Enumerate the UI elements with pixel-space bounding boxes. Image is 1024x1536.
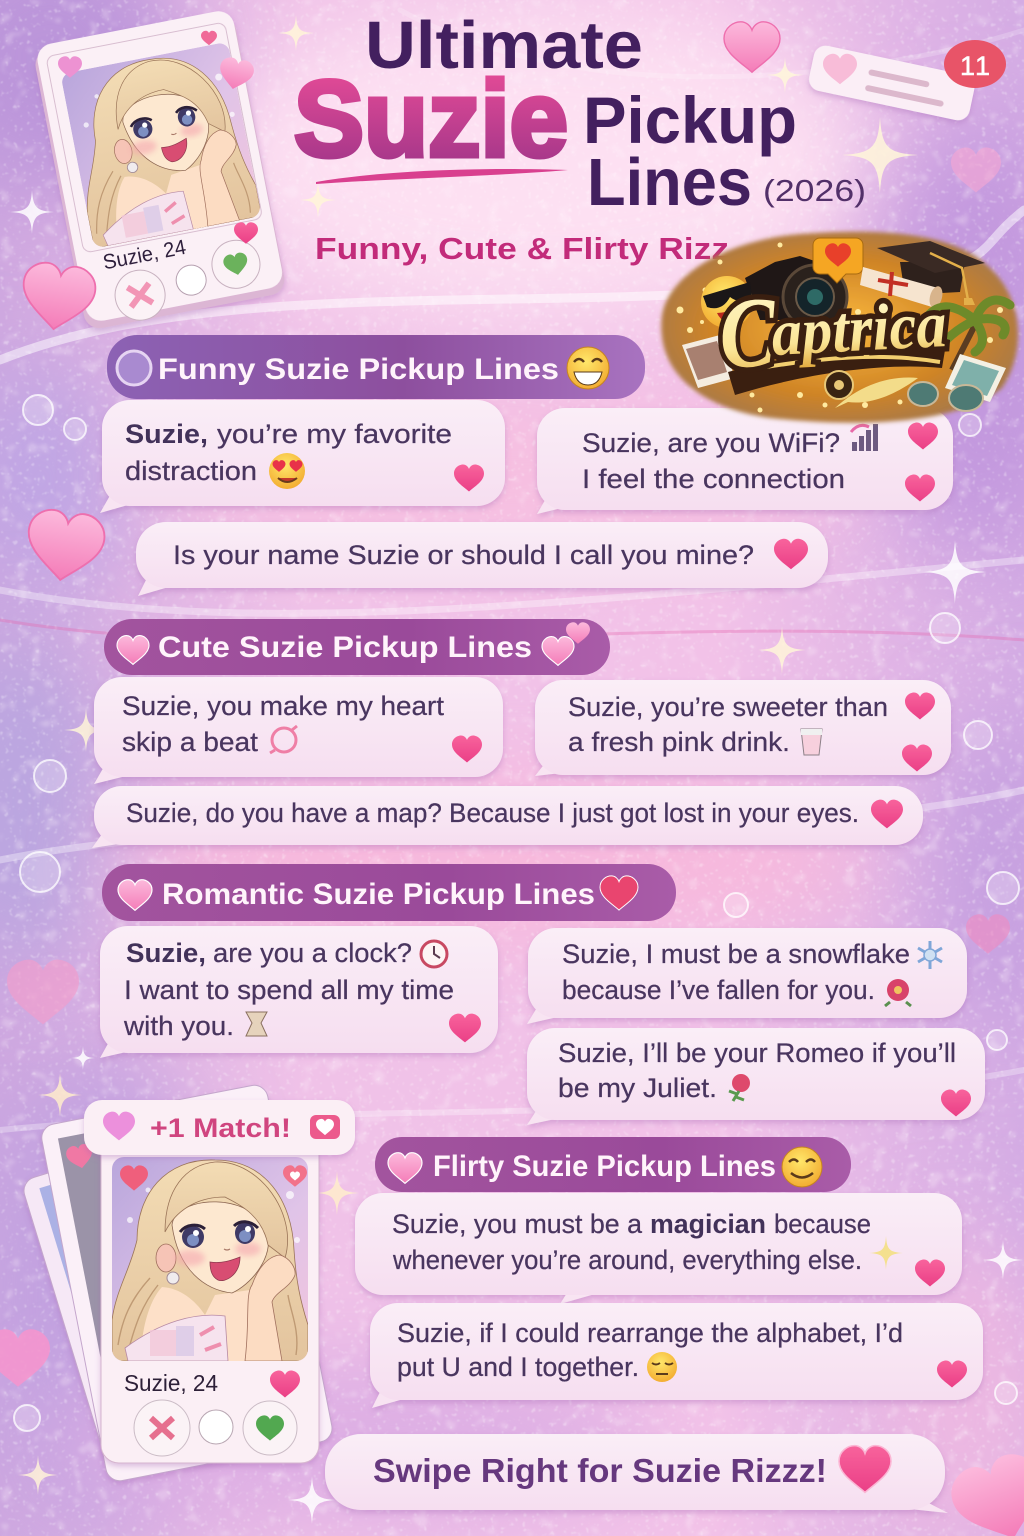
logo wordmark: aptrica bbox=[770, 288, 948, 370]
title: Lines bbox=[587, 145, 752, 220]
line text: you’re my favorite bbox=[217, 419, 452, 449]
logo wordmark bbox=[717, 267, 949, 395]
notification card bbox=[807, 40, 1006, 123]
line text: Suzie, are you WiFi? bbox=[582, 428, 840, 458]
line text: because bbox=[774, 1209, 871, 1239]
icon: like heart bbox=[270, 1370, 300, 1398]
line text: I want to spend all my time bbox=[124, 975, 454, 1005]
vacation photos bbox=[682, 335, 1006, 402]
icon: flower bbox=[885, 979, 911, 1006]
icon: heart bbox=[774, 539, 808, 569]
icon: heart bbox=[117, 636, 149, 664]
line text: skip a beat bbox=[122, 727, 259, 757]
line text: put U and I together. bbox=[397, 1352, 639, 1382]
line text: because I’ve fallen for you. bbox=[562, 975, 875, 1005]
bubble: call you mine bbox=[136, 522, 828, 596]
card: top profile card bbox=[18, 8, 287, 334]
icon: heart bbox=[937, 1360, 967, 1388]
line text: Is your name Suzie or should I call you mine? bbox=[173, 540, 754, 570]
line text: be my Juliet. bbox=[558, 1073, 717, 1103]
line text: are you a clock? bbox=[213, 938, 412, 968]
bubble: magician bbox=[355, 1193, 962, 1304]
bubble: snowflake bbox=[527, 928, 967, 1024]
cta text: Swipe Right for Suzie Rizzz! bbox=[373, 1452, 827, 1489]
graduation cap bbox=[877, 241, 985, 305]
icon: photo hearts bbox=[120, 1165, 307, 1191]
icon: star bbox=[869, 1236, 903, 1270]
line text: Suzie, I’ll be your Romeo if you’ll bbox=[558, 1038, 956, 1068]
icon: heart eyes bbox=[269, 453, 305, 489]
line text: I feel the connection bbox=[582, 464, 845, 494]
line text: Suzie, you must be a bbox=[392, 1209, 643, 1239]
line text bbox=[558, 1038, 956, 1103]
heading text: Romantic Suzie Pickup Lines bbox=[162, 878, 595, 911]
line text bbox=[397, 1318, 903, 1382]
card buttons bbox=[134, 1400, 297, 1456]
icon: signal bbox=[851, 424, 878, 451]
icon: heart bbox=[600, 876, 638, 910]
icon: heart bbox=[452, 736, 482, 762]
title: Pickup bbox=[583, 83, 797, 157]
line text: Suzie, bbox=[125, 419, 208, 449]
aviator sunglasses bbox=[908, 382, 983, 411]
section heading: flirty bbox=[375, 1137, 851, 1192]
subtitle: Funny, Cute & Flirty Rizz bbox=[315, 231, 729, 266]
icon: heart bbox=[449, 1014, 481, 1042]
line text bbox=[392, 1209, 871, 1275]
icon: spinning heart bbox=[270, 726, 297, 753]
match pill bbox=[84, 1100, 355, 1155]
icon: heart bbox=[839, 1446, 891, 1492]
icon: heart bbox=[103, 1112, 135, 1140]
diploma scroll bbox=[860, 267, 945, 309]
stacked back cards bbox=[21, 1083, 334, 1484]
icon: heart tile bbox=[310, 1115, 340, 1139]
sunglasses emoji bbox=[701, 276, 753, 328]
icon: heart bbox=[388, 1153, 422, 1183]
bubble: map bbox=[92, 786, 923, 848]
portrait: Suzie bbox=[112, 1157, 308, 1361]
icon: heart bbox=[871, 800, 903, 828]
line text bbox=[123, 938, 454, 1041]
line text: a fresh pink drink. bbox=[568, 727, 790, 757]
bubble: clock bbox=[100, 926, 498, 1058]
title bbox=[294, 8, 866, 220]
bubble: favorite distraction bbox=[100, 400, 505, 513]
line text: Suzie, do you have a map? Because I just got lost in your eyes. bbox=[126, 798, 859, 828]
profile name: Suzie, 24 bbox=[101, 236, 188, 274]
icon: double hearts bbox=[542, 622, 590, 665]
icon: hourglass bbox=[246, 1012, 267, 1036]
line text: Suzie, if I could rearrange the alphabet, I’d bbox=[397, 1318, 903, 1348]
line text: Suzie, I must be a snowflake bbox=[562, 939, 910, 969]
line text: distraction bbox=[125, 456, 257, 486]
line text bbox=[568, 692, 888, 757]
line text: Suzie, bbox=[126, 938, 206, 968]
line text bbox=[582, 428, 845, 494]
palm tree bbox=[925, 300, 1010, 370]
icon: heart bbox=[941, 1090, 971, 1116]
icon: heart ring bbox=[117, 351, 151, 385]
logo wordmark: C bbox=[717, 276, 779, 390]
section heading: funny bbox=[107, 335, 645, 399]
line text: with you. bbox=[123, 1011, 234, 1041]
icon: relieved emoji bbox=[647, 1352, 677, 1382]
card buttons bbox=[109, 236, 267, 324]
title: Ultimate bbox=[365, 8, 643, 83]
line text: whenever you’re around, everything else. bbox=[392, 1245, 862, 1275]
icon: snowflake bbox=[918, 941, 942, 969]
title: Suzie bbox=[294, 58, 568, 179]
line text bbox=[122, 691, 445, 757]
section heading: romantic bbox=[102, 864, 676, 921]
bubble: pink drink bbox=[535, 680, 951, 776]
call to action bbox=[325, 1434, 948, 1513]
heading text: Cute Suzie Pickup Lines bbox=[158, 631, 532, 664]
line text: Suzie, you’re sweeter than bbox=[568, 692, 888, 722]
logo: Captrica bbox=[661, 232, 1018, 423]
camera bbox=[745, 256, 847, 329]
aperture and feather bbox=[825, 371, 918, 408]
title: (2026) bbox=[763, 173, 866, 208]
bubble: skip a beat bbox=[94, 677, 503, 784]
section heading: cute bbox=[104, 619, 610, 675]
heading text: Funny Suzie Pickup Lines bbox=[158, 353, 559, 386]
icon: smile bbox=[567, 347, 609, 389]
icon: heart bbox=[118, 880, 152, 910]
icon: rose bbox=[729, 1074, 750, 1101]
icon: drink bbox=[801, 729, 822, 755]
bubble: alphabet bbox=[370, 1303, 983, 1408]
portrait: Suzie bbox=[60, 42, 262, 248]
profile name: Suzie, 24 bbox=[124, 1370, 218, 1396]
icon: hearts bbox=[902, 692, 935, 772]
bubble: Romeo bbox=[527, 1028, 985, 1125]
icon: heart bbox=[915, 1260, 945, 1286]
heading text: Flirty Suzie Pickup Lines bbox=[433, 1150, 776, 1183]
line text bbox=[562, 939, 910, 1005]
bubble: WiFi bbox=[537, 408, 953, 514]
badge: 11 bbox=[944, 40, 1006, 88]
line text: magician bbox=[650, 1209, 766, 1239]
line text: Suzie, you make my heart bbox=[122, 691, 445, 721]
icon: smile bbox=[782, 1147, 822, 1187]
card: bottom profile card bbox=[101, 1133, 319, 1463]
badge: 11: 11 bbox=[960, 51, 990, 81]
icon: hearts bbox=[905, 422, 938, 502]
icon: clock bbox=[421, 941, 447, 967]
speech heart bbox=[813, 238, 863, 283]
icon: heart bbox=[454, 464, 484, 492]
pill text: +1 Match! bbox=[150, 1113, 291, 1143]
line text bbox=[125, 419, 452, 486]
